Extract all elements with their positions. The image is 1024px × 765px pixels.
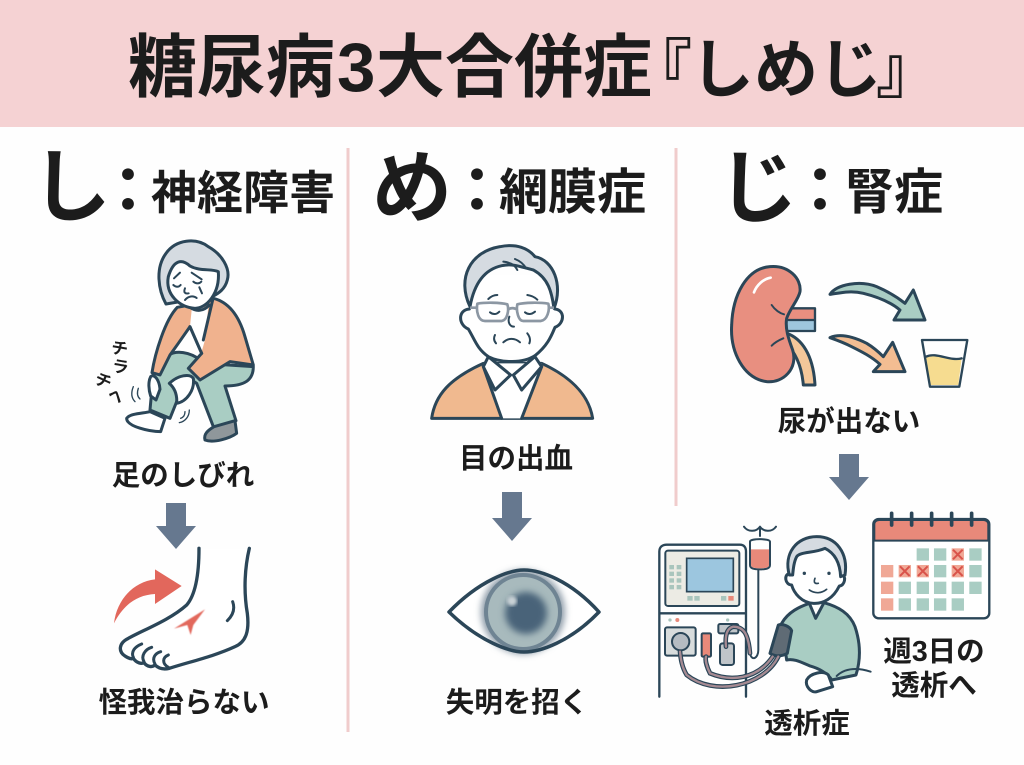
title banner xyxy=(0,0,1024,127)
panel: neuropathy xyxy=(31,140,335,719)
icon: injured foot xyxy=(114,548,249,669)
icon: elderly woman with numb legs xyxy=(92,241,253,441)
heading: shi neuropathy xyxy=(31,140,335,232)
icon: blurred eye xyxy=(449,570,599,654)
label: dialysis: 透析症 xyxy=(764,708,850,740)
label: no urine: 尿が出ない xyxy=(778,405,920,438)
icon: calendar with marked days xyxy=(873,513,989,618)
icon: elderly woman with numb legs: ラ xyxy=(110,356,130,378)
heading: ji nephropathy: ： xyxy=(789,140,851,230)
panel: retinopathy xyxy=(372,140,646,719)
icon: elderly woman with numb legs: チ xyxy=(110,338,129,360)
icon: kidney and urine flow xyxy=(732,267,967,387)
arrow: down xyxy=(829,454,869,500)
title banner: 『 xyxy=(628,34,692,106)
label: dialysis three days a week: 透析へ xyxy=(891,670,977,702)
icon: elderly woman with numb legs: チ xyxy=(92,369,115,393)
heading: ji nephropathy: 腎症 xyxy=(845,166,943,220)
label: numb feet: 足のしびれ xyxy=(112,460,254,492)
icon: dialysis machine and patient xyxy=(659,527,871,697)
label: dialysis three days a week xyxy=(883,636,985,702)
label: wounds do not heal: 怪我治らない xyxy=(98,687,270,719)
heading: me retinopathy: ： xyxy=(446,140,508,230)
heading: me retinopathy: 網膜症 xyxy=(499,166,646,220)
arrow: down xyxy=(492,492,532,541)
heading: shi neuropathy: ： xyxy=(97,140,159,230)
heading: ji nephropathy xyxy=(718,140,943,233)
heading: shi neuropathy: し xyxy=(31,143,111,232)
title banner: 』 xyxy=(876,34,940,106)
heading: shi neuropathy: 神経障害 xyxy=(151,167,335,219)
icon: elderly man with glasses xyxy=(432,246,593,418)
title banner: 糖尿病 xyxy=(128,29,335,106)
panel: nephropathy xyxy=(659,140,989,740)
heading: ji nephropathy: じ xyxy=(718,144,798,233)
title banner: 3 xyxy=(337,29,375,106)
label: leads to blindness: 失明を招く xyxy=(446,687,588,719)
arrow: down xyxy=(156,503,196,549)
title banner: 大合併症 xyxy=(376,29,652,106)
label: dialysis three days a week: 週3日の xyxy=(883,636,985,668)
heading: me retinopathy xyxy=(372,140,646,233)
title banner: しめじ xyxy=(690,34,882,106)
heading: me retinopathy: め xyxy=(372,144,452,233)
icon: elderly woman with numb legs: ヘ xyxy=(105,386,126,408)
label: bleeding in the eye: 目の出血 xyxy=(459,443,573,475)
